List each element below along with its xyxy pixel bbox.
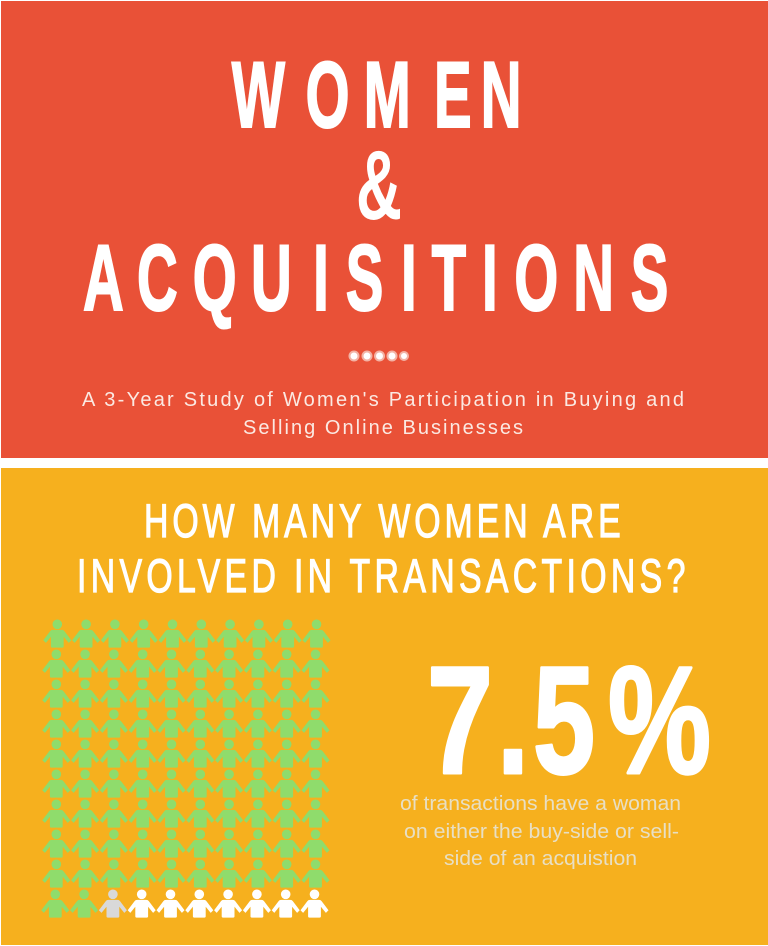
pictogram: 100 people — [41, 620, 331, 918]
big number: 7 — [427, 635, 493, 806]
caption: on either the buy-side or sell- — [404, 821, 679, 843]
big number — [427, 635, 711, 806]
section heading: INVOLVED IN TRANSACTIONS? — [77, 550, 685, 602]
big number: 5 — [533, 635, 595, 806]
caption: side of an acquistion — [444, 848, 637, 870]
big number: . — [497, 635, 529, 806]
title: Acquisitions: ACQUISITIONS — [83, 226, 668, 331]
caption: of transactions have a woman — [400, 793, 681, 815]
panel: statistics — [1, 468, 768, 945]
subtitle: Selling Online Businesses — [243, 417, 523, 439]
panel: title — [1, 1, 768, 458]
caption — [400, 793, 681, 870]
title: ampersand: & — [356, 130, 402, 240]
section heading: HOW MANY WOMEN ARE — [144, 495, 621, 547]
section heading — [77, 495, 685, 602]
subtitle: A 3-Year Study of Women's Participation in Buying and — [82, 389, 684, 411]
subtitle — [82, 389, 684, 439]
big number: % — [608, 635, 711, 806]
title: Women: WOMEN — [232, 43, 522, 148]
decorative dots — [348, 350, 409, 362]
